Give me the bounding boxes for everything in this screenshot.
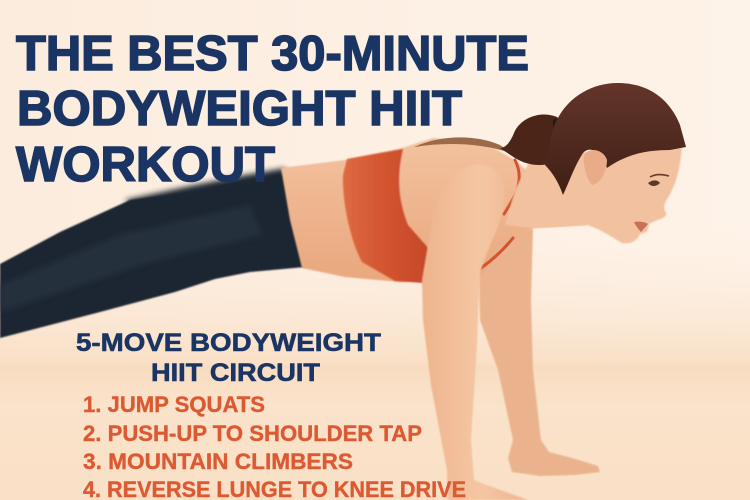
exercise list: 1. JUMP SQUATS <box>83 392 265 417</box>
far arm and hand <box>478 228 600 476</box>
torso <box>281 138 587 282</box>
title <box>16 27 529 192</box>
crop top <box>343 149 430 283</box>
exercise list: 2. PUSH-UP TO SHOULDER TAP <box>83 421 422 446</box>
subheading <box>76 329 381 387</box>
ponytail <box>500 114 570 165</box>
ear <box>584 150 607 185</box>
title: THE BEST 30-MINUTE <box>16 27 529 81</box>
hair streak along back <box>414 137 515 155</box>
hair tie <box>553 119 560 131</box>
subheading: 5-MOVE BODYWEIGHT <box>76 329 381 357</box>
subheading: HIIT CIRCUIT <box>151 359 320 387</box>
title: BODYWEIGHT HIIT <box>17 82 462 136</box>
eye and brow <box>648 175 669 186</box>
head and neck skin <box>505 148 682 243</box>
exercise list <box>83 392 466 500</box>
leggings <box>0 168 305 338</box>
far crop top strap <box>481 160 519 268</box>
figure: woman in plank position <box>0 83 686 500</box>
near arm <box>422 164 528 500</box>
lips <box>634 222 648 232</box>
exercise list: 3. MOUNTAIN CLIMBERS <box>83 449 353 474</box>
title: WORKOUT <box>16 138 275 192</box>
hair <box>545 83 686 195</box>
